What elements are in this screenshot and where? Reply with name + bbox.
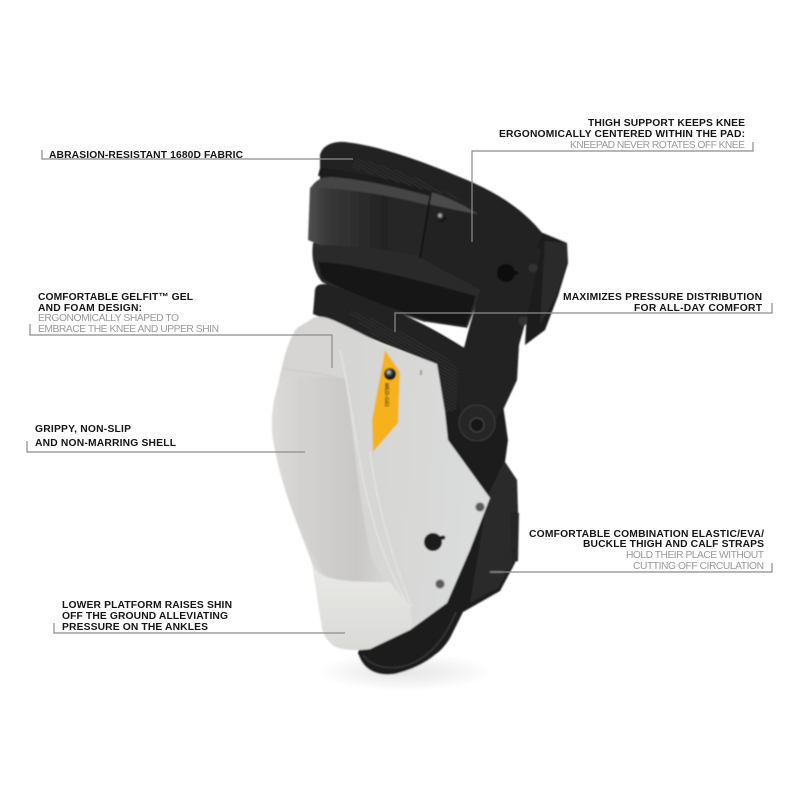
callout: pressure distribution: FOR ALL-DAY COMFORT	[634, 303, 763, 314]
callout: grippy shell: AND NON-MARRING SHELL	[35, 438, 176, 449]
callout: gelfit gel and foam: ERGONOMICALLY SHAPED TO	[38, 313, 179, 324]
callout: pressure distribution: MAXIMIZES PRESSURE DISTRIBUTION	[563, 292, 762, 303]
callout: thigh support: THIGH SUPPORT KEEPS KNEE	[588, 118, 745, 129]
mesh strip on thigh pad	[352, 158, 520, 240]
top step line	[283, 368, 345, 380]
ground shadow	[317, 653, 493, 691]
callout: lower platform: PRESSURE ON THE ANKLES	[62, 622, 208, 633]
callout: thigh support: ERGONOMICALLY CENTERED WITHIN THE PAD:	[499, 129, 745, 140]
knee pad product illustration	[272, 142, 568, 691]
yellow logo panel	[372, 350, 400, 452]
callout: gelfit gel and foam: EMBRACE THE KNEE AND UPPER SHIN	[38, 324, 219, 335]
white gap between cushion and shin band	[425, 322, 467, 347]
centre bulge shading	[272, 376, 385, 584]
callout: straps: HOLD THEIR PLACE WITHOUT	[626, 550, 765, 561]
callout: grippy shell	[27, 424, 305, 452]
callout: thigh support: KNEEPAD NEVER ROTATES OFF KNEE	[570, 140, 745, 151]
main shell	[272, 317, 490, 650]
panel ridge	[340, 350, 410, 607]
callout: pressure distribution	[395, 292, 772, 332]
callout: straps: BUCKLE THIGH AND CALF STRAPS	[583, 539, 764, 550]
callout: grippy shell: GRIPPY, NON-SLIP	[35, 424, 131, 435]
callout: lower platform	[54, 600, 345, 633]
upper thigh padding	[320, 142, 543, 262]
thigh strap at rear	[520, 226, 568, 345]
callout: thigh support	[472, 118, 753, 242]
shell hardware	[424, 502, 484, 588]
rear black padding and calf strap	[358, 345, 519, 675]
thigh hard shell	[308, 168, 432, 258]
shell bulge and body	[272, 317, 490, 650]
thigh cushion behind shell	[312, 238, 482, 328]
callout: straps: CUTTING OFF CIRCULATION	[633, 561, 764, 572]
lower platform	[312, 563, 412, 650]
side support arm	[420, 190, 541, 440]
callout: lower platform: OFF THE GROUND ALLEVIATING	[62, 611, 228, 622]
small shell label	[420, 370, 422, 375]
callout: gelfit gel and foam	[30, 292, 332, 368]
yellow logo panel: MED-GEI	[383, 383, 389, 407]
pivot hinge	[459, 405, 495, 441]
callout: abrasion-resistant fabric: ABRASION-RESISTANT 1680D FABRIC	[49, 150, 244, 161]
callout: gelfit gel and foam: AND FOAM DESIGN:	[38, 303, 142, 314]
callout: straps: COMFORTABLE COMBINATION ELASTIC/EVA/	[529, 529, 764, 540]
callout: abrasion-resistant fabric	[42, 150, 353, 161]
callout: straps	[503, 529, 772, 572]
callout: lower platform: LOWER PLATFORM RAISES SHIN	[62, 600, 232, 611]
callout: gelfit gel and foam: COMFORTABLE GELFIT™ GEL	[38, 292, 193, 303]
shin top band	[313, 284, 465, 412]
